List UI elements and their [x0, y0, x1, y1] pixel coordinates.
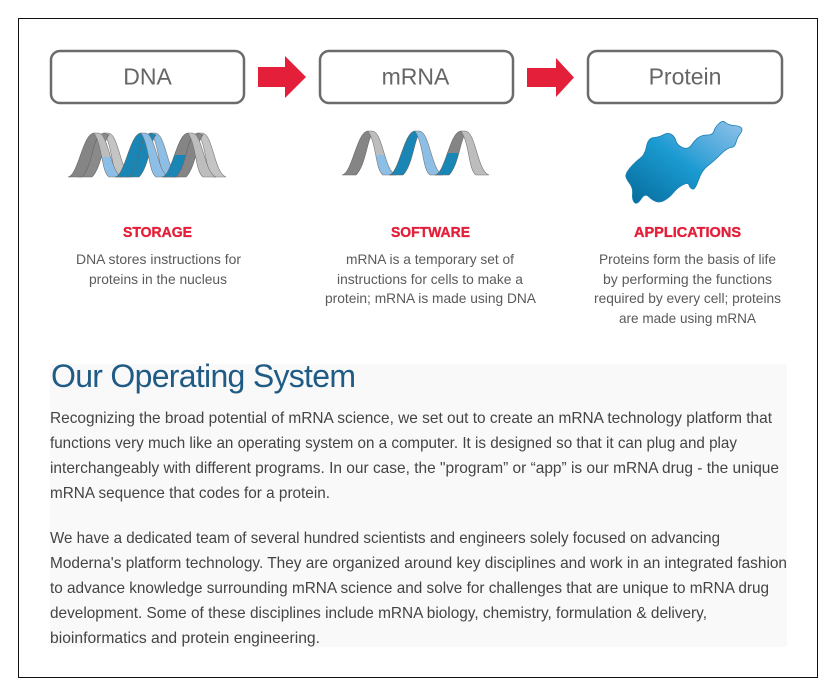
Protein label box — [588, 51, 782, 103]
arrow: DNA to mRNA — [258, 56, 306, 98]
text: DNA description: DNA stores instructions for — [76, 251, 241, 267]
icon: DNA double helix — [68, 133, 226, 177]
paragraph 2: bioinformatics and protein engineering. — [50, 630, 320, 647]
paragraph 1 — [50, 410, 779, 502]
paragraph 1: Recognizing the broad potential of mRNA science, we set out to create an mRNA technology platform that — [50, 410, 773, 427]
heading: applications: APPLICATIONS — [634, 225, 741, 241]
Protein label box: Protein — [649, 64, 721, 90]
paragraph 2 — [50, 530, 787, 647]
mRNA label box: mRNA — [382, 64, 450, 90]
text: protein description: required by every cell; proteins — [594, 290, 781, 306]
text: mRNA description — [325, 251, 537, 306]
text: DNA description: proteins in the nucleus — [89, 271, 227, 287]
text: mRNA description: protein; mRNA is made using DNA — [325, 290, 537, 306]
heading: software: SOFTWARE — [391, 225, 470, 241]
paragraph 1: functions very much like an operating system on a computer. It is designed so that it can plug and play — [50, 435, 737, 452]
text: protein description: by performing the functions — [603, 271, 772, 287]
text: protein description — [594, 251, 781, 326]
heading: storage: STORAGE — [123, 225, 192, 241]
text: DNA description — [76, 251, 241, 287]
paragraph 1: mRNA sequence that codes for a protein. — [50, 485, 330, 502]
panel: operating system background — [50, 364, 787, 647]
text: mRNA description: instructions for cells to make a — [337, 271, 523, 287]
panel: DNA — [51, 51, 244, 287]
icon: mRNA single strand — [342, 131, 489, 175]
panel: mRNA — [320, 51, 537, 306]
paragraph 1: interchangeably with different programs. In our case, the "program” or “app” is our mRNA drug - the unique — [50, 460, 779, 477]
title: Our Operating System — [51, 358, 356, 394]
paragraph 2: We have a dedicated team of several hundred scientists and engineers solely focused on advancing — [50, 530, 720, 547]
DNA label box: DNA — [123, 64, 172, 90]
panel: Protein — [588, 51, 782, 326]
text: protein description: are made using mRNA — [619, 310, 757, 326]
text: protein description: Proteins form the basis of life — [599, 251, 776, 267]
paragraph 2: development. Some of these disciplines include mRNA biology, chemistry, formulation & delivery, — [50, 605, 707, 622]
arrow: mRNA to Protein — [527, 58, 574, 97]
mRNA label box — [320, 51, 513, 103]
paragraph 2: Moderna's platform technology. They are organized around key disciplines and work in an integrated fashion — [50, 555, 787, 572]
text: mRNA description: mRNA is a temporary set of — [346, 251, 514, 267]
icon: protein blob — [626, 121, 742, 203]
DNA label box — [51, 51, 244, 103]
paragraph 2: to advance knowledge surrounding mRNA science and solve for challenges that are unique to mRNA drug — [50, 580, 769, 597]
